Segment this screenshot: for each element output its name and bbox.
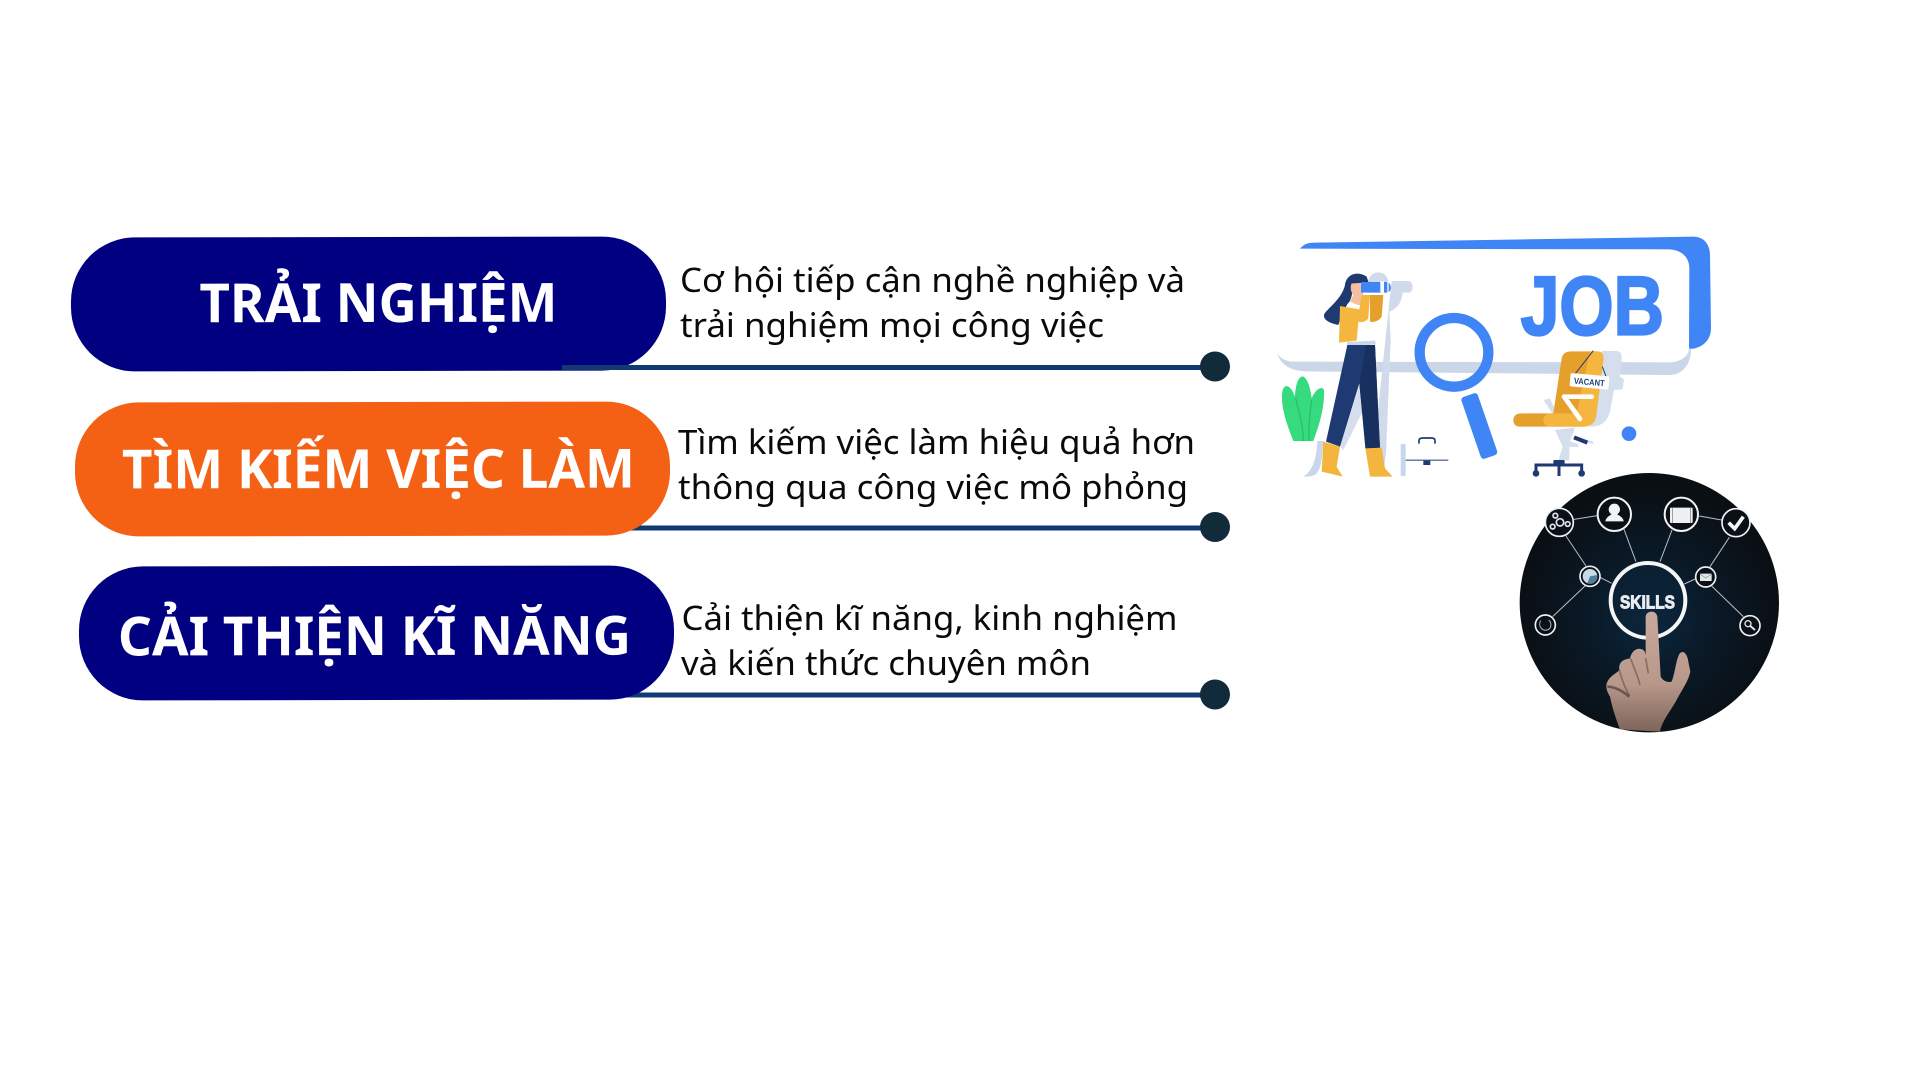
text block: row 3 description [681, 594, 1178, 685]
pointing hand [1606, 612, 1690, 732]
office chair with vacant sign: VACANT [1574, 376, 1606, 388]
network links [1553, 516, 1743, 617]
connector line: row 3 [620, 692, 1210, 698]
pill: CẢI THIỆN KĨ NĂNG [79, 565, 674, 701]
magnifying glass [1420, 318, 1498, 460]
node: gears [1545, 508, 1573, 536]
text block: row 1 description: Cơ hội tiếp cận nghề nghiệp và [680, 256, 1185, 302]
node: pie chart [1580, 566, 1600, 586]
text block: row 1 description: trải nghiệm mọi công việc [680, 301, 1104, 347]
text block: row 3 description: Cải thiện kĩ năng, kinh nghiệm [682, 594, 1178, 640]
woman with binoculars [1322, 272, 1413, 477]
office chair with vacant sign [1513, 351, 1624, 477]
node: search [1740, 616, 1760, 636]
dark circle background [1520, 473, 1779, 732]
image: skills network [1520, 473, 1779, 732]
text block: row 2 description: thông qua công việc mô phỏng [678, 463, 1188, 509]
pill: CẢI THIỆN KĨ NĂNG: CẢI THIỆN KĨ NĂNG [118, 597, 631, 671]
pill: TRẢI NGHIỆM: TRẢI NGHIỆM [199, 264, 558, 338]
blue dot [1622, 426, 1636, 441]
connector dot: row 2 [1200, 512, 1230, 542]
connector dot: row 1 [1200, 352, 1230, 382]
job board frame [1277, 237, 1711, 375]
central SKILLS ring [1611, 563, 1685, 638]
text block: row 2 description [678, 418, 1195, 509]
node: person [1598, 498, 1631, 531]
text block: row 1 description [680, 256, 1185, 347]
pill: TÌM KIẾM VIỆC LÀM: TÌM KIẾM VIỆC LÀM [122, 430, 635, 504]
briefcase [1401, 438, 1448, 476]
connector dot: row 3 [1200, 680, 1230, 710]
node: tablet [1665, 498, 1698, 531]
text block: row 3 description: và kiến thức chuyên môn [681, 639, 1091, 685]
text block: row 2 description: Tìm kiếm việc làm hiệu quả hơn [678, 418, 1195, 464]
plant [1282, 376, 1324, 477]
JOB lettering: JOB [1521, 259, 1664, 352]
node: check mark [1722, 509, 1750, 537]
central SKILLS ring: SKILLS [1620, 592, 1675, 613]
connector line: row 1 [562, 365, 1210, 370]
node: spinner [1535, 615, 1555, 635]
pill: TÌM KIẾM VIỆC LÀM [75, 401, 670, 537]
node: envelope [1696, 567, 1716, 587]
connector line: row 2 [620, 526, 1210, 530]
illustration: job search [1277, 237, 1711, 477]
pill: TRẢI NGHIỆM [71, 236, 666, 372]
